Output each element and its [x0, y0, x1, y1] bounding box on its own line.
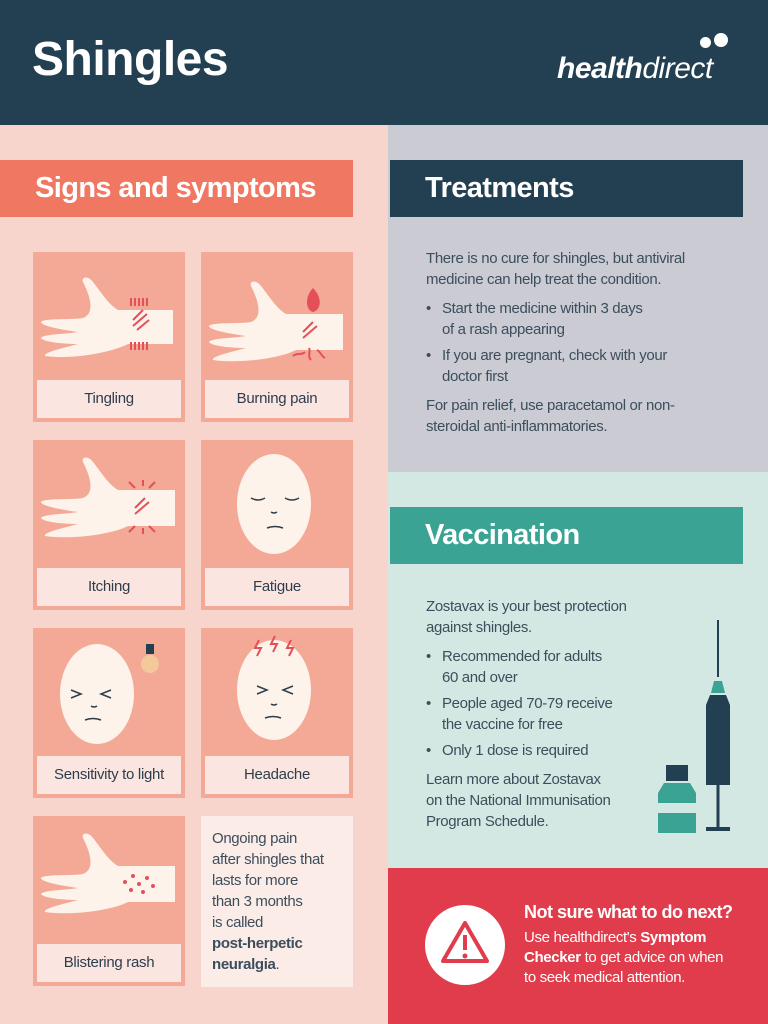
card: sensitivity to light [33, 628, 185, 798]
text block: post-herpetic neuralgia: is called [212, 914, 263, 931]
heading: signs and symptoms: Signs and symptoms [35, 172, 316, 204]
text: vaccination: Only 1 dose is required [442, 742, 588, 759]
text: vaccination: Program Schedule. [426, 813, 548, 830]
text: treatments: There is no cure for shingles, but antiviral [426, 250, 685, 267]
text: vaccination: the vaccine for free [442, 716, 563, 733]
card: burning pain: Burning pain [237, 390, 317, 407]
card: blistering rash [33, 816, 185, 986]
heading: treatments: Treatments [425, 172, 574, 204]
heading: signs and symptoms [0, 160, 353, 217]
logo: healthdirect [557, 52, 713, 85]
text: treatments: Start the medicine within 3 days [442, 300, 643, 317]
text block: post-herpetic neuralgia: post-herpetic [212, 935, 302, 952]
heading: treatments [390, 160, 743, 217]
card: blistering rash: Blistering rash [64, 954, 154, 971]
icon: syringe and vial [658, 620, 730, 833]
card: tingling: Tingling [84, 390, 134, 407]
card: itching [33, 440, 185, 610]
card: sensitivity to light: Sensitivity to light [54, 766, 164, 783]
text: treatments: If you are pregnant, check with your [442, 347, 667, 364]
logo [557, 33, 728, 85]
text: treatments: doctor first [442, 368, 508, 385]
card: itching: Itching [88, 578, 130, 595]
text block: post-herpetic neuralgia: neuralgia. [212, 956, 279, 973]
text: treatments: steroidal anti-inflammatories. [426, 418, 607, 435]
text block: post-herpetic neuralgia: than 3 months [212, 893, 303, 910]
text: vaccination: on the National Immunisation [426, 792, 610, 809]
text: vaccination [426, 598, 627, 830]
icon: warning [425, 905, 505, 985]
card: fatigue: Fatigue [253, 578, 301, 595]
card: burning pain [201, 252, 353, 422]
card: headache: Headache [244, 766, 310, 783]
heading: vaccination [390, 507, 743, 564]
panel: next steps [388, 868, 768, 1024]
text: call to action: Checker to get advice on when [524, 949, 723, 966]
text: vaccination: Recommended for adults [442, 648, 602, 665]
card: fatigue [201, 440, 353, 610]
text block: post-herpetic neuralgia: after shingles that [212, 851, 324, 868]
text block: post-herpetic neuralgia: lasts for more [212, 872, 298, 889]
text: vaccination: 60 and over [442, 669, 517, 686]
text block: post-herpetic neuralgia: Ongoing pain [212, 830, 297, 847]
text: treatments: of a rash appearing [442, 321, 565, 338]
text: treatments: medicine can help treat the condition. For pain relief, use paracetamol or non- [426, 271, 675, 414]
text: vaccination: against shingles. Learn more about Zostavax [426, 619, 601, 788]
panel backgrounds [388, 125, 768, 472]
text: call to action: to seek medical attention. [524, 969, 685, 986]
text: call to action [524, 902, 733, 986]
text block: post-herpetic neuralgia [201, 816, 353, 987]
card: tingling [33, 252, 185, 422]
text: call to action: Use healthdirect's Symptom [524, 929, 706, 946]
heading: vaccination: Vaccination [425, 519, 580, 551]
title: Shingles [32, 33, 228, 86]
text: call to action: Not sure what to do next? [524, 902, 733, 922]
card: headache [201, 628, 353, 798]
text: vaccination: People aged 70-79 receive [442, 695, 613, 712]
text: vaccination: Zostavax is your best protection [426, 598, 627, 615]
header [0, 0, 768, 125]
